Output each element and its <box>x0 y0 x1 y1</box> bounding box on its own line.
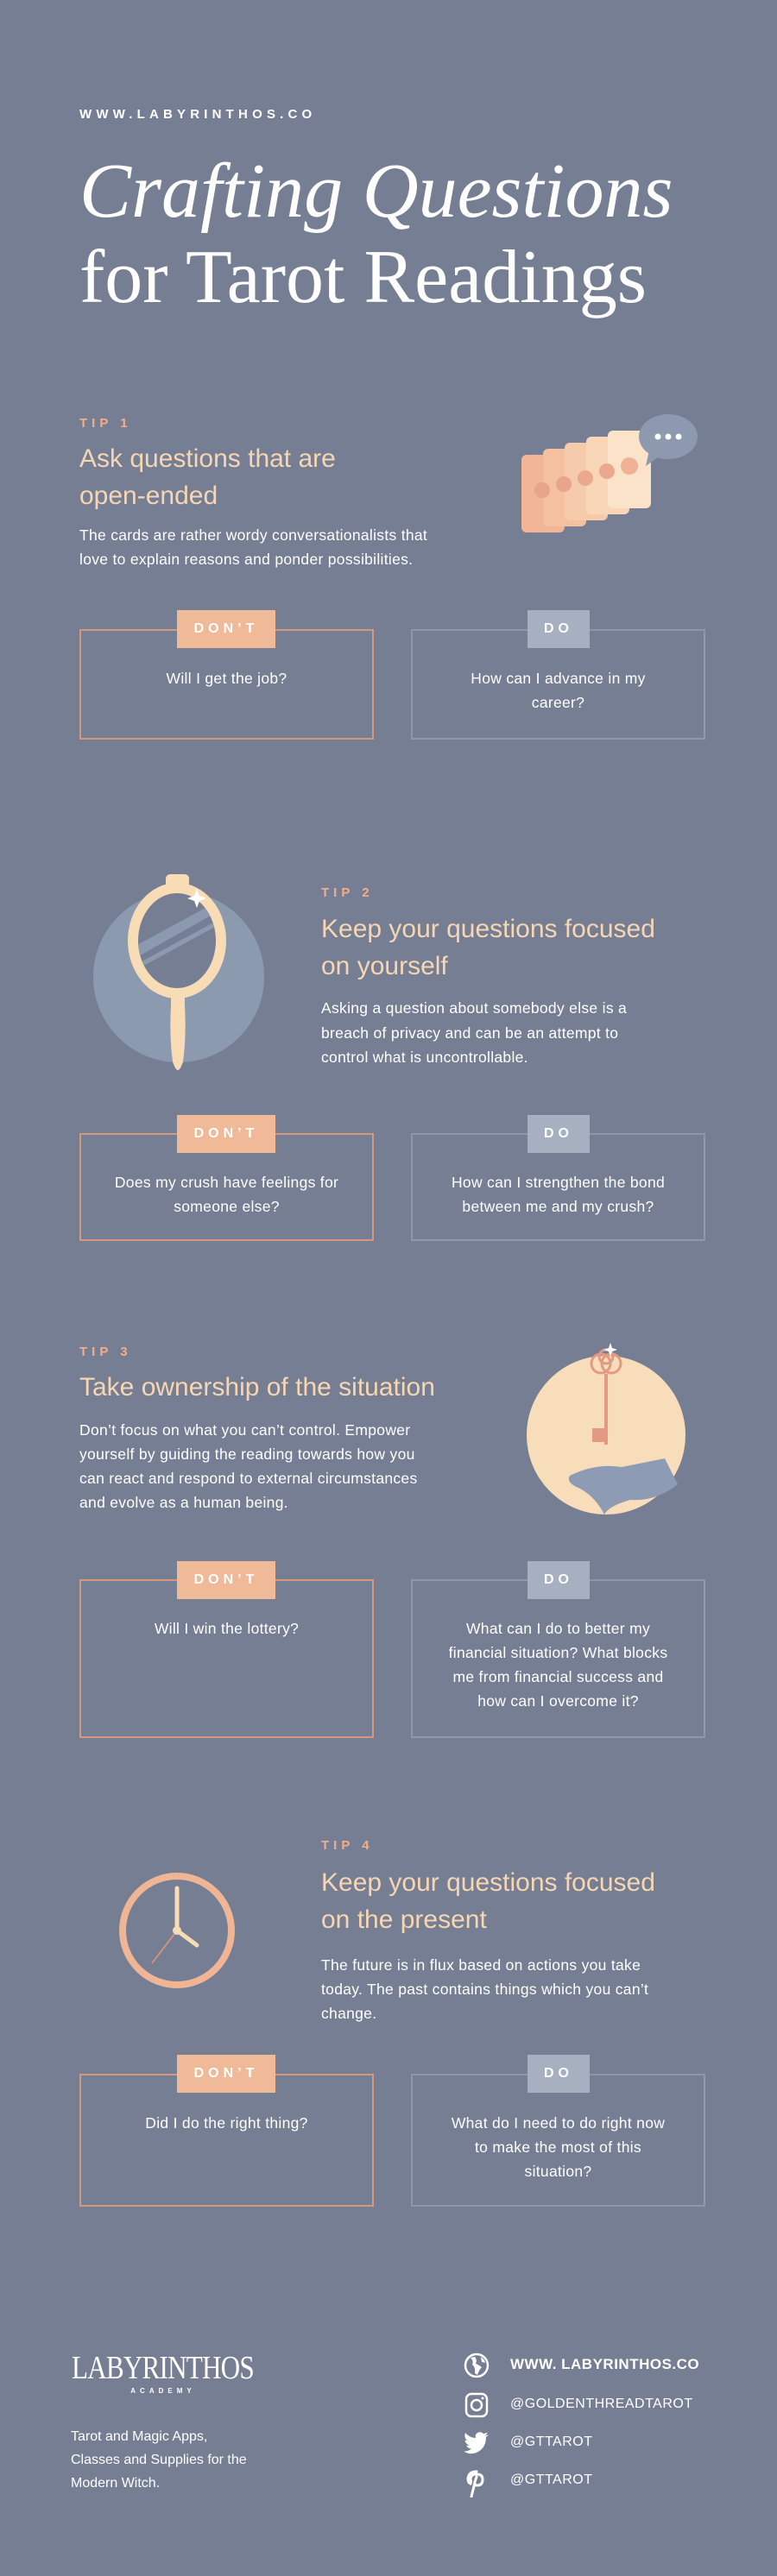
icon: instagram <box>464 2392 489 2418</box>
do box: between me and my crush? <box>462 1198 654 1215</box>
don't tab: DON’T <box>194 1126 258 1141</box>
do tab <box>527 2055 590 2093</box>
tip 2 body: control what is uncontrollable. <box>321 1049 528 1066</box>
don't tab: DON’T <box>194 621 258 636</box>
don't box: Will I get the job? <box>167 670 287 687</box>
don't box: Will I win the lottery? <box>155 1620 299 1637</box>
tip 3 body: yourself by guiding the reading towards how you <box>79 1445 415 1463</box>
tip 3 label: TIP 3 <box>79 1345 132 1359</box>
don't box <box>79 629 374 740</box>
icon: twitter <box>464 2432 489 2454</box>
tip 3 body <box>79 1421 418 1511</box>
do box: financial situation? What blocks <box>449 1644 667 1661</box>
tip 2 heading: Keep your questions focused <box>321 915 655 943</box>
title <box>79 148 673 319</box>
panel: tip 2 <box>79 874 705 1241</box>
don't box: someone else? <box>174 1198 280 1215</box>
icon: hand mirror <box>93 874 264 1070</box>
footer: logo: ACADEMY <box>130 2387 196 2395</box>
do box: What do I need to do right now <box>452 2114 665 2132</box>
do tab <box>527 1561 590 1599</box>
do box: career? <box>532 694 584 711</box>
tip 4 body: change. <box>321 2005 376 2022</box>
tip 4 heading: Keep your questions focused <box>321 1868 655 1897</box>
tip 1 body: The cards are rather wordy conversationalists that <box>79 526 427 544</box>
don't tab: DON’T <box>194 1572 258 1587</box>
panel: tip 3 <box>79 1343 705 1738</box>
tip 2 label: TIP 2 <box>321 885 374 900</box>
tip 4 body <box>321 1956 648 2022</box>
footer: social links: @GOLDENTHREADTAROT <box>510 2396 693 2411</box>
don't box: Does my crush have feelings for <box>115 1174 338 1191</box>
icon: globe <box>464 2352 489 2378</box>
do box: how can I overcome it? <box>477 1692 639 1710</box>
do box: How can I advance in my <box>471 670 646 687</box>
footer: social links <box>464 2352 699 2497</box>
tip 4 body: The future is in flux based on actions you take <box>321 1956 641 1974</box>
icon: pinterest <box>466 2470 483 2497</box>
tip 1 body <box>79 526 427 568</box>
don't tab <box>177 1115 275 1153</box>
do tab: DO <box>544 2066 573 2081</box>
don't box <box>79 2074 374 2207</box>
tip 1 label: TIP 1 <box>79 416 132 431</box>
footer: tagline: Modern Witch. <box>71 2476 160 2491</box>
tip 1 body: love to explain reasons and ponder possibilities. <box>79 551 413 568</box>
icon: clock <box>119 1873 235 1988</box>
tip 4 heading: on the present <box>321 1905 487 1934</box>
footer: tagline: Tarot and Magic Apps, <box>71 2429 207 2444</box>
tip 3 body: Don’t focus on what you can’t control. Empower <box>79 1421 410 1439</box>
don't box <box>79 1133 374 1241</box>
tip 1 heading: open-ended <box>79 482 218 510</box>
tip 3 body: and evolve as a human being. <box>79 1494 288 1511</box>
tip 2 body: Asking a question about somebody else is a <box>321 999 627 1017</box>
do tab <box>527 1115 590 1153</box>
footer: logo: LABYRINTHOS <box>72 2350 254 2386</box>
don't tab <box>177 2055 275 2093</box>
panel: tip 4 <box>79 1838 705 2207</box>
do box <box>411 2074 705 2207</box>
don't box: Did I do the right thing? <box>145 2114 308 2132</box>
do tab: DO <box>544 621 573 636</box>
do box: me from financial success and <box>452 1668 664 1685</box>
footer: tagline: Classes and Supplies for the <box>71 2453 247 2467</box>
footer: social links: WWW. LABYRINTHOS.CO <box>510 2356 699 2372</box>
footer: social links: @GTTAROT <box>510 2472 592 2487</box>
footer: tagline <box>71 2429 247 2491</box>
tip 2 heading: on yourself <box>321 952 448 980</box>
do box <box>411 629 705 740</box>
do box: What can I do to better my <box>466 1620 650 1637</box>
tip 4 body: today. The past contains things which you can’t <box>321 1981 648 1998</box>
do tab: DO <box>544 1572 573 1587</box>
don't tab <box>177 1561 275 1599</box>
icon: tarot cards with speech bubble <box>521 414 698 532</box>
do tab: DO <box>544 1126 573 1141</box>
title: for Tarot Readings <box>79 236 647 319</box>
do tab <box>527 610 590 648</box>
tip 2 body <box>321 999 627 1066</box>
do box: How can I strengthen the bond <box>452 1174 665 1191</box>
tip 2 heading <box>321 915 655 980</box>
icon: key over hand <box>527 1343 685 1515</box>
tip 3 body: can react and respond to external circumstances <box>79 1470 418 1487</box>
don't tab: DON’T <box>194 2066 258 2081</box>
tip 1 heading <box>79 444 336 510</box>
do box <box>411 1133 705 1241</box>
do box: to make the most of this <box>475 2138 641 2156</box>
tip 2 body: breach of privacy and can be an attempt to <box>321 1023 618 1041</box>
tip 1 heading: Ask questions that are <box>79 444 336 473</box>
tip 4 heading <box>321 1868 655 1934</box>
header url: WWW.LABYRINTHOS.CO <box>79 107 316 122</box>
panel: tip 1 <box>79 414 705 740</box>
do box <box>411 1579 705 1738</box>
do box: situation? <box>525 2163 591 2180</box>
title: Crafting Questions <box>79 148 673 234</box>
don't tab <box>177 610 275 648</box>
tip 4 label: TIP 4 <box>321 1838 374 1853</box>
tip 3 heading: Take ownership of the situation <box>79 1373 435 1401</box>
don't box <box>79 1579 374 1738</box>
footer: social links: @GTTAROT <box>510 2434 592 2449</box>
